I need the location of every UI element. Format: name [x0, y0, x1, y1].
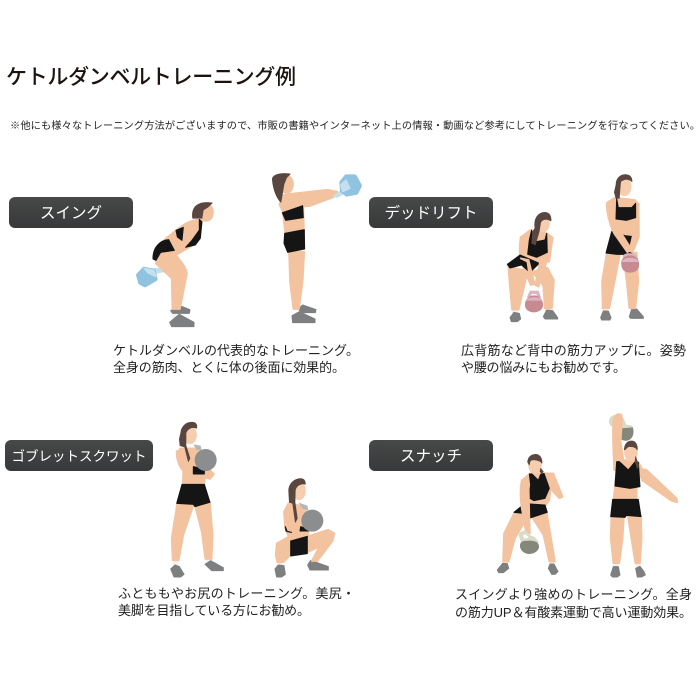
figure: goblet squat	[275, 479, 334, 577]
panel: snatch	[369, 414, 677, 577]
text: goblet description: ふとももやお尻のトレーニング。美尻・	[118, 586, 355, 601]
note text: ※他にも様々なトレーニング方法がございますので、市販の書籍やインターネット上の情報・動画など参考にしてトレーニングを行なってください。	[10, 119, 700, 132]
label: swing: スイング	[40, 204, 102, 222]
text: deadlift description: 広背筋など背中の筋力アップに。姿勢	[461, 343, 686, 358]
figure: deadlift standing	[601, 175, 643, 320]
figure: swing bent over	[138, 202, 213, 327]
label: snatch	[369, 440, 493, 471]
text: swing description	[113, 343, 359, 375]
figure: deadlift bent	[507, 212, 558, 322]
panel: goblet squat	[5, 422, 334, 577]
label: deadlift: デッドリフト	[384, 203, 478, 222]
label: snatch: スナッチ	[400, 448, 462, 465]
text: deadlift description: や腰の悩みにもお勧めです。	[461, 360, 626, 375]
text: snatch description: スイングより強めのトレーニング。全身	[455, 587, 692, 602]
label: swing	[9, 197, 133, 228]
label: deadlift	[369, 197, 493, 228]
text: snatch description: の筋力UP＆有酸素運動で高い運動効果。	[455, 605, 692, 620]
panel: swing	[9, 174, 360, 327]
text: goblet description	[118, 586, 355, 618]
panel: deadlift	[369, 175, 643, 322]
text: deadlift description	[461, 343, 686, 375]
text: snatch description	[455, 587, 692, 620]
label: goblet squat: ゴブレットスクワット	[12, 448, 146, 464]
text: swing description: 全身の筋肉、とくに体の後面に効果的。	[113, 360, 345, 375]
figure: snatch overhead	[609, 414, 677, 577]
label: goblet squat	[5, 440, 153, 471]
figure: goblet standing	[171, 422, 223, 577]
figure: snatch low	[497, 454, 563, 574]
title: ケトルダンベルトレーニング例	[6, 66, 296, 89]
figure: swing raised	[272, 174, 360, 323]
text: swing description: ケトルダンベルの代表的なトレーニング。	[113, 343, 359, 358]
text: goblet description: 美脚を目指している方にお勧め。	[118, 603, 310, 618]
